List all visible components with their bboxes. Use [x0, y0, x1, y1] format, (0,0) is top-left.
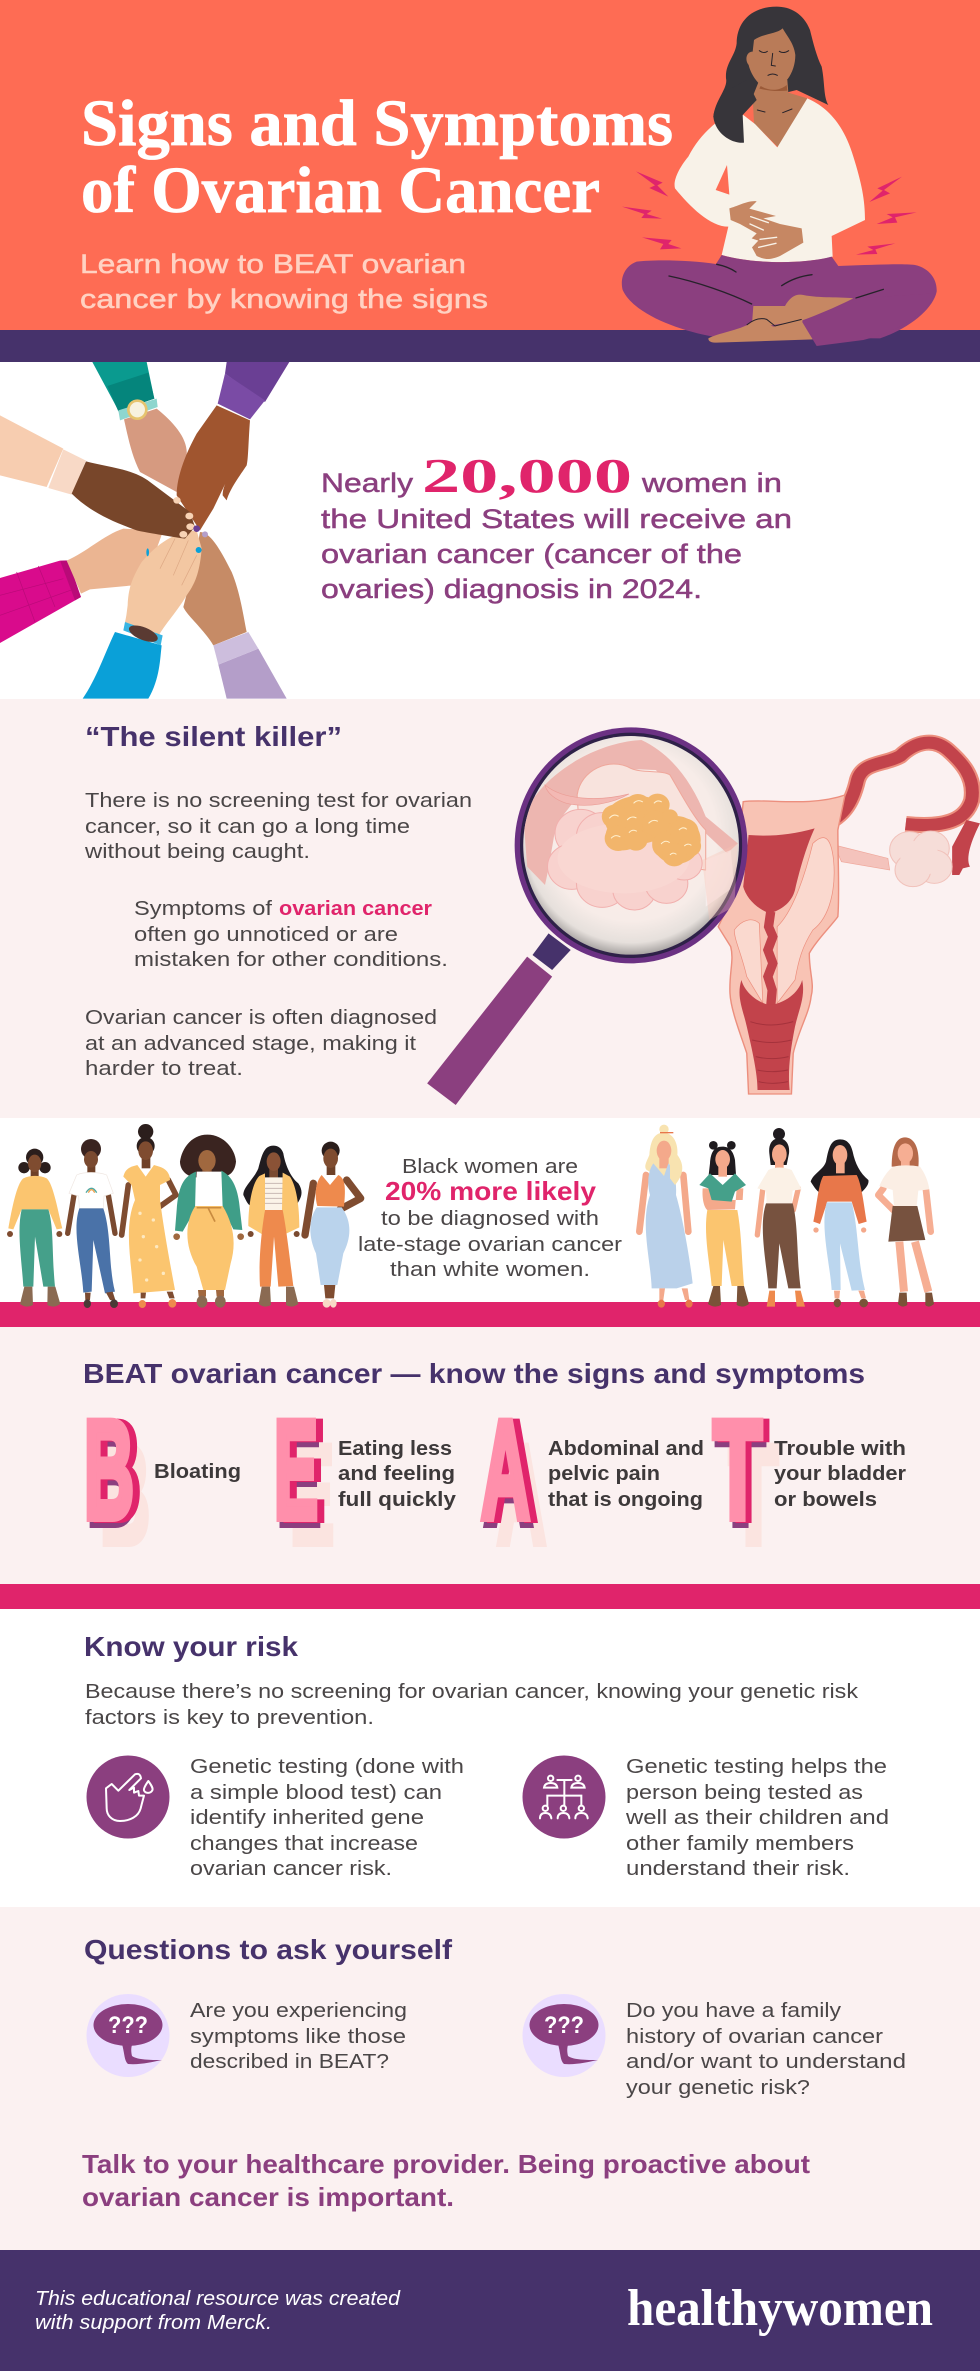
text: question 2: Do you have a family — [626, 1999, 842, 2022]
call to action — [82, 2149, 810, 2212]
title: Signs and Symptoms — [81, 87, 673, 160]
letter B: B — [91, 1392, 141, 1549]
letter T: T — [713, 1391, 762, 1548]
sponsor note — [35, 2288, 401, 2334]
text block: screening — [84, 789, 472, 863]
letter B: B — [84, 1391, 134, 1548]
figure 5 — [243, 1146, 302, 1307]
text block: late diagnosis — [85, 1006, 437, 1080]
text: genetic testing 1: changes that increase — [190, 1832, 418, 1855]
text: question 2: history of ovarian cancer — [626, 2025, 883, 2048]
illustration: seated woman in pain — [622, 7, 937, 346]
disparity text: Black women are — [402, 1155, 578, 1178]
text: genetic testing 1: identify inherited gene — [190, 1806, 424, 1829]
call to action: Talk to your healthcare provider. Being proactive about — [82, 2149, 810, 2179]
disparity text: late-stage ovarian cancer — [358, 1233, 622, 1256]
letter E: E — [281, 1392, 325, 1549]
footer — [0, 2250, 980, 2371]
illustration: group of Black women — [7, 1124, 361, 1308]
text: genetic testing 2: well as their children and — [625, 1806, 889, 1829]
intro text — [85, 1680, 859, 1729]
text block: symptoms: often go unnoticed or are — [134, 923, 398, 946]
label A: that is ongoing — [548, 1488, 703, 1511]
text: genetic testing 2: Genetic testing helps the — [626, 1755, 887, 1778]
title: of Ovarian Cancer — [81, 154, 600, 227]
label A: pelvic pain — [548, 1462, 660, 1485]
figure 8 — [699, 1141, 749, 1307]
panel: BEAT: B — [100, 1416, 150, 1573]
text block: screening: without being caught. — [84, 840, 310, 863]
subtitle: cancer by knowing the signs — [80, 284, 488, 314]
text block: late diagnosis: at an advanced stage, making it — [85, 1032, 416, 1055]
text block: screening: cancer, so it can go a long time — [85, 815, 410, 838]
letter E — [274, 1391, 334, 1573]
text: question 2 — [626, 1999, 906, 2099]
panel: questions to ask yourself — [0, 1907, 980, 2250]
figure 1 — [7, 1149, 62, 1307]
sponsor note: with support from Merck. — [35, 2312, 272, 2334]
label E — [338, 1437, 457, 1511]
label T: Trouble with — [774, 1437, 906, 1460]
text block: symptoms: mistaken for other conditions. — [134, 948, 448, 971]
panel: nearly 20,000 statistic — [0, 362, 980, 699]
label E: full quickly — [338, 1488, 457, 1511]
intro text: Because there’s no screening for ovarian cancer, knowing your genetic risk — [85, 1680, 859, 1703]
call to action: ovarian cancer is important. — [82, 2182, 454, 2212]
text: genetic testing 1: a simple blood test) can — [190, 1781, 442, 1804]
heading: BEAT ovarian cancer — know the signs and symptoms — [83, 1358, 865, 1389]
text block: screening: There is no screening test for ovarian — [85, 789, 472, 812]
logo: healthywomen — [627, 2280, 933, 2337]
disparity text: than white women. — [390, 1258, 590, 1281]
label T: your bladder — [774, 1462, 906, 1485]
figure 9 — [757, 1128, 805, 1307]
icon: question bubble 2: ??? — [544, 2012, 584, 2039]
figure 10 — [811, 1139, 869, 1307]
letter A: A — [488, 1392, 537, 1549]
illustration: group of white and Asian women — [639, 1125, 934, 1308]
disparity text — [358, 1155, 622, 1281]
figure 3 — [122, 1124, 176, 1308]
label T: or bowels — [774, 1488, 877, 1511]
text: question 2: your genetic risk? — [626, 2076, 810, 2099]
label E: Eating less — [338, 1437, 452, 1460]
letter T — [713, 1391, 778, 1573]
icon: finger prick blood test — [86, 1756, 170, 1838]
text: genetic testing 1: Genetic testing (done with — [190, 1755, 464, 1778]
icon: question bubble 1: ??? — [108, 2012, 148, 2039]
text: genetic testing 2: other family members — [626, 1832, 854, 1855]
figure 6 — [305, 1142, 361, 1308]
sponsor note: This educational resource was created — [35, 2288, 401, 2310]
subtitle — [80, 249, 488, 314]
letter A: A — [481, 1391, 530, 1548]
stat text: 20,000 — [422, 448, 632, 503]
text block: symptoms — [134, 897, 448, 971]
label E: and feeling — [338, 1462, 455, 1485]
letter B — [84, 1391, 150, 1573]
figure 11 — [878, 1137, 934, 1307]
text: genetic testing 1 — [190, 1755, 464, 1880]
disparity text: 20% more likely — [385, 1176, 597, 1206]
subtitle: Learn how to BEAT ovarian — [80, 249, 466, 279]
panel: the silent killer — [0, 699, 980, 1118]
text: genetic testing 2: understand their risk. — [626, 1857, 850, 1880]
heading: Know your risk — [84, 1631, 298, 1662]
header banner — [0, 0, 980, 362]
heading: Questions to ask yourself — [84, 1934, 453, 1965]
letter T: T — [716, 1397, 765, 1554]
figure 4 — [173, 1135, 244, 1308]
icon: question bubble 1 — [86, 1994, 170, 2077]
title — [81, 87, 673, 227]
text: question 2: and/or want to understand — [626, 2050, 906, 2073]
label A: Abdominal and — [548, 1437, 704, 1460]
stat text — [321, 448, 792, 604]
stat text: women in — [641, 468, 782, 498]
stat text: ovaries) diagnosis in 2024. — [321, 574, 702, 604]
text: genetic testing 1: ovarian cancer risk. — [190, 1857, 392, 1880]
text: question 1: symptoms like those — [190, 2025, 406, 2048]
letter A: A — [484, 1397, 533, 1554]
stat text: ovarian cancer (cancer of the — [321, 539, 742, 569]
text block: late diagnosis: harder to treat. — [85, 1057, 243, 1080]
text block: late diagnosis: Ovarian cancer is often diagnosed — [85, 1006, 437, 1029]
letter T: T — [719, 1392, 768, 1549]
panel: know your risk — [0, 1609, 980, 1907]
letter A — [481, 1391, 546, 1573]
text block: symptoms: ovarian cancer — [279, 897, 432, 920]
figure 7 — [639, 1125, 693, 1308]
letter E: E — [277, 1397, 321, 1554]
letter B: B — [87, 1397, 137, 1554]
label B: Bloating — [154, 1460, 241, 1483]
letter T: T — [729, 1416, 778, 1573]
text: genetic testing 2 — [625, 1755, 889, 1880]
panel: BEAT: A — [497, 1416, 546, 1573]
figure 2 — [68, 1139, 118, 1308]
label T — [774, 1437, 906, 1511]
intro text: factors is key to prevention. — [85, 1706, 374, 1729]
letter E: E — [274, 1391, 318, 1548]
text: genetic testing 2: person being tested as — [626, 1781, 863, 1804]
icon: family tree — [522, 1756, 606, 1838]
disparity text: to be diagnosed with — [381, 1207, 599, 1230]
text block: symptoms: Symptoms of — [134, 897, 272, 920]
icon: question bubble 2 — [522, 1994, 606, 2077]
stat text: the United States will receive an — [321, 504, 792, 534]
illustration: hands joined together — [0, 362, 289, 699]
label A — [548, 1437, 704, 1511]
panel: BEAT: E — [290, 1416, 334, 1573]
text: question 1: described in BEAT? — [190, 2050, 389, 2073]
text: question 1 — [190, 1999, 407, 2073]
panel: BEAT — [0, 1327, 980, 1609]
text: question 1: Are you experiencing — [190, 1999, 407, 2022]
stat text: Nearly — [321, 468, 414, 498]
heading: “The silent killer” — [85, 721, 342, 752]
panel: disparity — [0, 1118, 980, 1327]
illustration: reproductive system with magnifier — [427, 727, 980, 1105]
